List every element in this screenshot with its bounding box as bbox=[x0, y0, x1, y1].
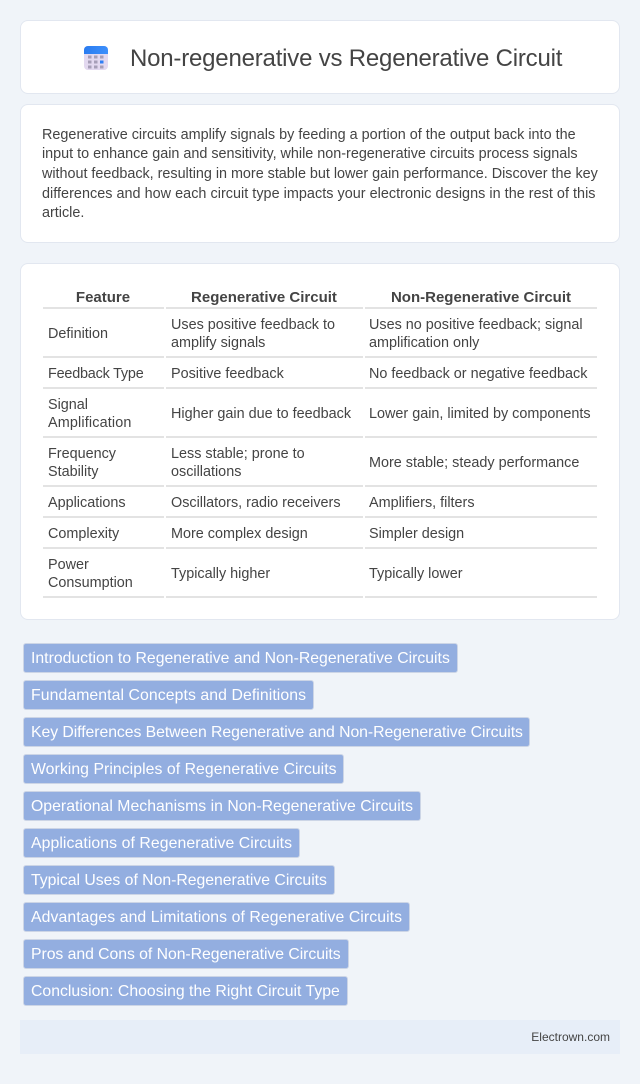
footer credit: Electrown.com bbox=[531, 1030, 610, 1044]
table header bbox=[76, 289, 571, 306]
comparison table: Typically lower bbox=[369, 566, 463, 582]
comparison table: amplify signals bbox=[171, 335, 265, 351]
comparison table: Power bbox=[48, 557, 89, 573]
footer bbox=[20, 1020, 620, 1054]
comparison table: oscillations bbox=[171, 464, 241, 480]
link 10: Conclusion: Choosing the Right Circuit Type bbox=[31, 983, 340, 1000]
link 2: Fundamental Concepts and Definitions bbox=[31, 687, 306, 704]
comparison table: Uses no positive feedback; signal bbox=[369, 317, 583, 333]
section links bbox=[23, 643, 530, 1006]
link 3: Key Differences Between Regenerative and Non-Regenerative Circuits bbox=[31, 724, 523, 741]
comparison table: More stable; steady performance bbox=[369, 455, 579, 471]
panel: comparison table bbox=[20, 263, 620, 620]
intro text: without feedback, resulting in more stable but lower gain performance. Discover the key bbox=[42, 166, 598, 182]
icon: calendar bbox=[84, 46, 108, 70]
comparison table: Amplifiers, filters bbox=[369, 495, 475, 511]
link 6: Applications of Regenerative Circuits bbox=[31, 835, 292, 852]
comparison table: Consumption bbox=[48, 575, 133, 591]
panel: header bbox=[20, 20, 620, 94]
panel: introduction bbox=[20, 104, 620, 243]
comparison table: Stability bbox=[48, 464, 98, 480]
comparison table: Uses positive feedback to bbox=[171, 317, 335, 333]
link 2 bbox=[23, 680, 314, 710]
link 9: Pros and Cons of Non-Regenerative Circuits bbox=[31, 946, 341, 963]
intro text bbox=[42, 127, 598, 221]
comparison table: Typically higher bbox=[171, 566, 270, 582]
comparison table: Complexity bbox=[48, 526, 119, 542]
comparison table: Definition bbox=[48, 326, 108, 342]
comparison table: Feedback Type bbox=[48, 366, 144, 382]
link 5 bbox=[23, 791, 421, 821]
link 8: Advantages and Limitations of Regenerative Circuits bbox=[31, 909, 402, 926]
comparison table: amplification only bbox=[369, 335, 479, 351]
intro text: differences and how each circuit type impacts your electronic designs in the rest of this bbox=[42, 186, 596, 202]
comparison table: Higher gain due to feedback bbox=[171, 406, 351, 422]
link 4 bbox=[23, 754, 344, 784]
intro text: input to enhance gain and sensitivity, while non-regenerative circuits process signals bbox=[42, 146, 578, 162]
table header: Feature bbox=[76, 289, 130, 306]
comparison table bbox=[43, 289, 597, 598]
link 8 bbox=[23, 902, 410, 932]
comparison table: Less stable; prone to bbox=[171, 446, 305, 462]
comparison table: Amplification bbox=[48, 415, 132, 431]
link 3 bbox=[23, 717, 530, 747]
comparison table: Oscillators, radio receivers bbox=[171, 495, 341, 511]
link 4: Working Principles of Regenerative Circuits bbox=[31, 761, 337, 778]
table header: Regenerative Circuit bbox=[191, 289, 337, 306]
link 5: Operational Mechanisms in Non-Regenerative Circuits bbox=[31, 798, 413, 815]
comparison table: Applications bbox=[48, 495, 126, 511]
link 7 bbox=[23, 865, 335, 895]
table header: Non-Regenerative Circuit bbox=[391, 289, 571, 306]
comparison table: Positive feedback bbox=[171, 366, 284, 382]
comparison table: Signal bbox=[48, 397, 88, 413]
intro text: Regenerative circuits amplify signals by feeding a portion of the output back into the bbox=[42, 127, 576, 143]
comparison table: Lower gain, limited by components bbox=[369, 406, 591, 422]
comparison table: More complex design bbox=[171, 526, 308, 542]
comparison table: No feedback or negative feedback bbox=[369, 366, 587, 382]
link 1 bbox=[23, 643, 458, 673]
link 7: Typical Uses of Non-Regenerative Circuits bbox=[31, 872, 327, 889]
comparison table: Frequency bbox=[48, 446, 116, 462]
link 10 bbox=[23, 976, 348, 1006]
intro text: article. bbox=[42, 205, 84, 221]
link 9 bbox=[23, 939, 349, 969]
title: Non-regenerative vs Regenerative Circuit bbox=[130, 45, 562, 72]
link 1: Introduction to Regenerative and Non-Regenerative Circuits bbox=[31, 650, 450, 667]
link 6 bbox=[23, 828, 300, 858]
comparison table: Simpler design bbox=[369, 526, 464, 542]
